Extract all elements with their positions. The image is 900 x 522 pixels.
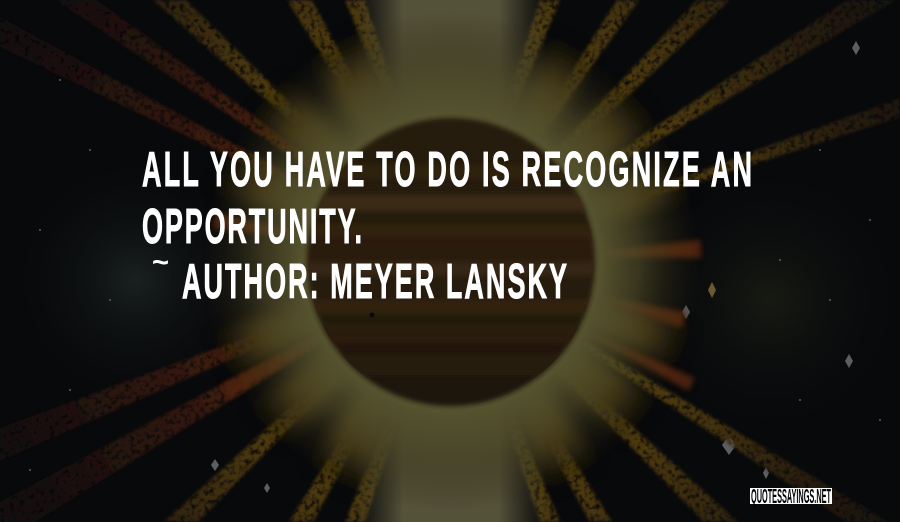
quote text line 1: ALL YOU HAVE TO DO IS RECOGNIZE AN [142, 143, 752, 197]
sunburst rays: inner flares [210, 27, 701, 497]
quote text line 2: OPPORTUNITY. [142, 200, 362, 254]
light beams above and below the planet [355, 0, 547, 522]
central glow [201, 12, 701, 512]
watermark badge [750, 486, 832, 508]
planet [307, 118, 595, 406]
author line: AUTHOR: MEYER LANSKY [182, 255, 567, 309]
tilde mark: ~ [152, 246, 169, 279]
